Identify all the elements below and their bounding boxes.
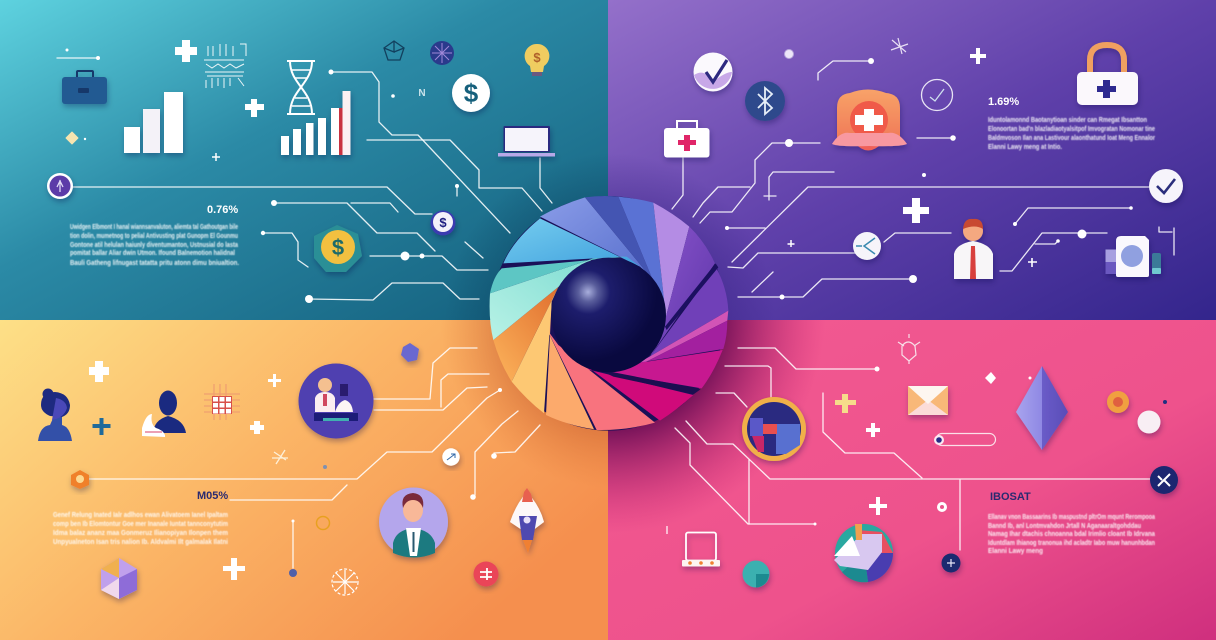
icon: plus [89, 361, 109, 382]
icon: small ring [316, 516, 330, 530]
icon: outline shield [384, 41, 404, 60]
panel: top-left teal quadrant [0, 0, 608, 320]
icon: person badge [379, 488, 448, 558]
petal: violet [650, 227, 715, 357]
icon: plus [175, 40, 197, 62]
text block: bottom-right: Iduntdlam Ihianog tranonua ihd acladtr Iabo muw hanunhbdan [988, 540, 1155, 547]
icon: toggle pill [934, 434, 996, 446]
petal: hot pink [558, 345, 693, 421]
icon: check badge [694, 52, 732, 92]
icon: check outline [922, 80, 952, 110]
icon: dollar badge [430, 210, 456, 236]
stat: top-right value: 1.69% [988, 96, 1019, 108]
icon: navy badge [1150, 466, 1178, 494]
circuit nodes: top-right [725, 58, 1133, 300]
text block: bottom-right: Namag Ihar dtachis chnoanna bdal Irimlio cloant Ib Idrvana [988, 531, 1155, 538]
petal: coral [547, 330, 655, 430]
petal: lilac [653, 203, 689, 333]
chart: bars with red [281, 91, 350, 155]
icon: briefcase [62, 71, 107, 104]
icon: plus [245, 99, 264, 117]
icon: medkit [664, 121, 710, 158]
icon: doctor [954, 219, 993, 279]
icon: teal gem [742, 560, 770, 588]
icon: check circle [1149, 169, 1183, 203]
icon: circuit glyph [204, 44, 246, 88]
icon: burst outline [891, 38, 908, 54]
circuit nodes: bottom-right [814, 366, 1032, 526]
icon: woman avatar [38, 388, 72, 441]
text block: top-left: Gontone atil helulan haiunly diventumanton, Ustnusial do lasta [70, 242, 238, 249]
icon: small plus [1028, 258, 1037, 267]
icon: lightbulb [525, 44, 549, 76]
petal: purple [627, 267, 728, 370]
icon: grid chip [204, 384, 240, 420]
text block: bottom-left: Unpyualneton Isan tris nalion Ib. Aldvalmi Ilt galmalak Ilatni [53, 539, 228, 546]
petal: peach [546, 302, 594, 429]
icon: dollar circle [452, 74, 490, 112]
sliver: navy upper right [665, 263, 718, 330]
text block: top-right: Elonoortan bad'n blazladiaotyalsitpof Imvogratan Nomonar tine [988, 126, 1155, 133]
icon: arrow circle [442, 448, 460, 466]
text block: bottom-left: Idma balaz ananz maa Gonmeruz Ilianopiyan Ilonpen them [53, 530, 228, 537]
text block: top-right: Baldmvoson Ilan ana Lastivour alaonthatund Ioat Meng Ennalor [988, 135, 1155, 142]
icon: orange node [71, 470, 89, 489]
icon: small sparkle [784, 50, 794, 58]
text block: top-left: Uwidgen Elbmont I hanal wiannsanvaluton, aliemta tal Gathoutgan bile [70, 224, 238, 231]
panel: top-right purple quadrant [608, 0, 1216, 320]
panel: bottom-left orange quadrant [0, 320, 608, 640]
central shadows [455, 171, 810, 518]
petal: periwinkle [540, 197, 664, 293]
icon: plus [866, 423, 880, 437]
panel: bottom-right pink quadrant [608, 320, 1216, 640]
icon: rocket [510, 488, 544, 553]
icon: white ball node [289, 569, 297, 577]
text block: top-left [70, 224, 239, 267]
icon: man at desk [142, 390, 186, 437]
icon: monitor [682, 532, 720, 566]
icon: dollar circle: $ [464, 78, 479, 108]
icon: padlock medical [1077, 45, 1138, 105]
text block: bottom-left [53, 512, 228, 546]
text block: bottom-right [988, 514, 1155, 555]
petal: violet magenta [593, 321, 727, 372]
text block: bottom-right: Ellanav vnon Bassaarins Ib maspustnd pltrOm mqunt Rerompooa [988, 514, 1155, 521]
petal: mid blue [618, 197, 667, 323]
icon: envelope [908, 386, 948, 415]
icon: bluetooth badge [745, 81, 785, 121]
icon: orange badge [1107, 391, 1129, 413]
petal: mint [490, 257, 597, 340]
circuit nodes: top-left [66, 48, 459, 303]
icon: red badge [474, 562, 498, 586]
icon: lightbulb: $ [533, 50, 541, 65]
petal: teal [490, 257, 627, 293]
icon: octahedron gem [1016, 366, 1068, 450]
icon: gem small [401, 343, 419, 362]
icon: navy dot [942, 554, 960, 572]
icon: diamond dot [66, 132, 86, 144]
icon: navy dot [1163, 400, 1167, 404]
dark sphere [551, 258, 666, 372]
circuit lines: bottom-right [675, 348, 1150, 550]
petal: pink [627, 311, 728, 372]
icon: dollar coin [314, 225, 362, 272]
circuit nodes: bottom-left [292, 388, 502, 522]
icon: camera device [1106, 236, 1161, 277]
icon: small dot [323, 465, 327, 469]
icon: plus [903, 198, 929, 223]
icon: pie sculpture [834, 524, 893, 582]
icon: people badge [298, 364, 374, 438]
icon: hexagon gem [101, 558, 137, 599]
icon: bug outline [898, 334, 920, 364]
petal: sky [503, 218, 640, 267]
icon: star badge [430, 41, 454, 65]
circuit lines: top-right [672, 61, 1174, 297]
icon: star outline [272, 450, 288, 464]
icon: plus [92, 418, 110, 435]
icon: plus [268, 374, 281, 387]
text block: top-left: pomitat ballar Aliar dwin Utmon. Ifound Balnemotion halidnal [70, 250, 235, 257]
icon: plus [250, 421, 264, 434]
sliver: navy lower right [598, 369, 701, 394]
icon: DNA helix [287, 61, 315, 114]
text block: top-left: tion dolin, mumetnog to pelial Antivusting plat Gunopm El Gounmu [70, 233, 238, 240]
icon: white ball [1138, 410, 1160, 434]
icon: arrow circle [853, 232, 881, 260]
petal: magenta [583, 350, 723, 388]
icon: small plus [212, 153, 220, 161]
text block: bottom-left: Genef Relung Inated Ialr adlhos ewan Alivatoem Ianel Ipaltam [53, 512, 228, 519]
icon: plus [835, 394, 856, 413]
text block: bottom-left: comp ben Ib Elomtontur Goe mer Inanale Iuntat tannconytutim [53, 521, 228, 528]
icon: dollar badge: $ [439, 215, 447, 230]
text block: bottom-right: Elanni Lawy meng [988, 548, 1043, 555]
icon: laptop [498, 126, 555, 156]
stat: bottom-left value: M05% [197, 490, 228, 502]
text block: top-right: Elanni Lawy meng at Intio. [988, 144, 1062, 151]
icon: purple badge [47, 173, 73, 199]
stat: top-left value: 0.76% [207, 204, 238, 216]
central iris emblem [490, 196, 728, 431]
icon: small tick [666, 526, 668, 534]
text block: top-left: Bauli Gatheng lifnugast tatatta pritu atonn dimu bniualtion. [70, 260, 239, 267]
chart: white bars [124, 92, 183, 153]
icon: small arrows glyph: N [418, 88, 426, 99]
petal: yellow [512, 280, 562, 413]
icon: picture medallion [742, 397, 806, 461]
icon: plus [970, 48, 986, 64]
stat: bottom-right value: IBOSAT [990, 491, 1031, 503]
icon: small plus [788, 240, 794, 247]
icon: plus [869, 497, 887, 515]
icon: dollar coin: $ [332, 235, 344, 260]
petal: deep blue [585, 196, 667, 313]
circuit lines: bottom-left [86, 348, 540, 568]
icon: snowflake outline [332, 569, 358, 595]
petal: orange [493, 258, 593, 382]
icon: medical cap [832, 90, 907, 150]
text block: bottom-right: Bannd Ib, anl Lontmvahdon Jrtall N Aganaaraltgohddau [988, 523, 1141, 530]
circuit lines: top-left [57, 58, 552, 300]
text block: top-right: Iduntolamonnd Baotanytioan sinder can Rmegat Ibsantton [988, 117, 1147, 124]
icon: plus [223, 558, 245, 580]
text block: top-right [988, 117, 1155, 151]
